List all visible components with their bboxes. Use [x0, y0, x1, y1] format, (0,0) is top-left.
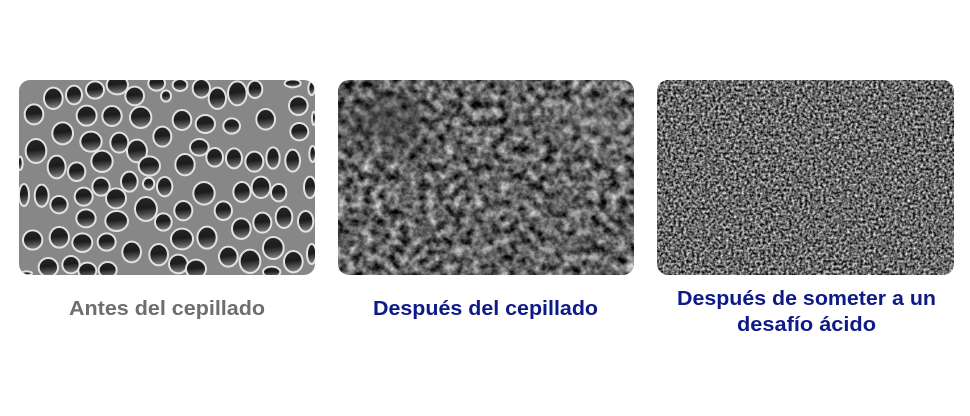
label: después del cepillado: Después del cepillado — [373, 298, 598, 320]
micrograph: open dentin tubules — [17, 76, 316, 279]
infographic — [19, 80, 954, 331]
label: después de someter a un desafío ácido: desafío ácido — [737, 314, 876, 336]
micrograph: occluded surface, coarse texture — [338, 80, 634, 275]
micrograph: occluded surface after acid, fine texture — [657, 80, 954, 275]
label: después de someter a un desafío ácido — [677, 288, 936, 336]
label: antes del cepillado: Antes del cepillado — [69, 298, 265, 320]
panel: antes del cepillado — [17, 76, 316, 320]
panel: después de someter a un desafío ácido — [657, 80, 954, 336]
open tubules — [17, 76, 316, 279]
panel: después del cepillado — [338, 80, 634, 320]
label: después de someter a un desafío ácido: Después de someter a un — [677, 288, 936, 310]
